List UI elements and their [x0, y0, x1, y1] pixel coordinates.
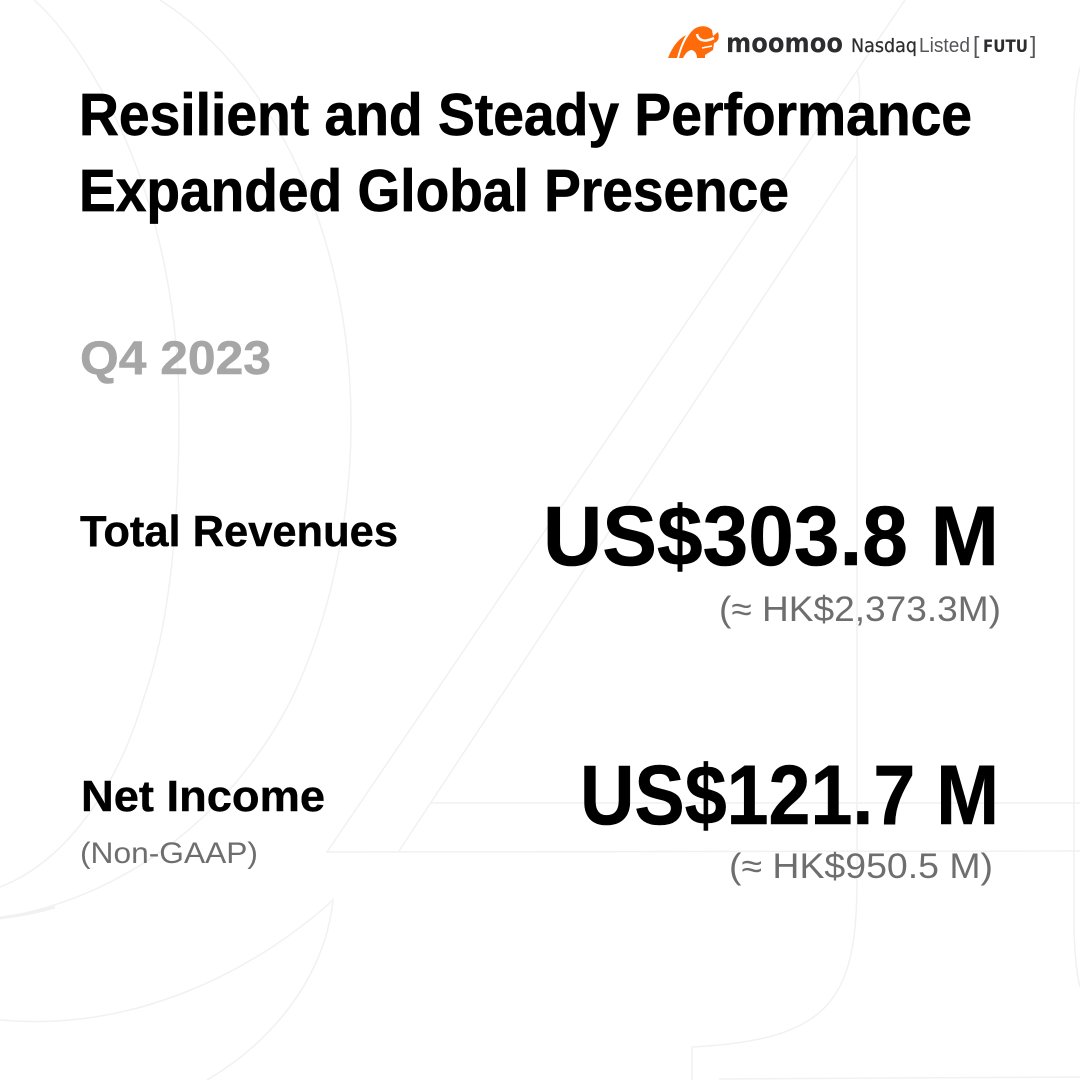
logo: moomoo Nasdaq Listed FUTU: [668, 26, 1036, 59]
title: Expanded Global Presence: [79, 158, 789, 224]
text: ticker FUTU: [: [973, 32, 980, 58]
metric label: Total Revenues: [80, 507, 398, 556]
title: [79, 82, 972, 224]
wordmark: moomoo: moomoo: [726, 28, 843, 59]
text: ticker FUTU: [973, 32, 1036, 58]
metric: net income: [80, 748, 999, 886]
metric value: US$303.8 M: [543, 489, 999, 583]
period label: Q4 2023: Q4 2023: [80, 331, 271, 384]
metric qualifier: (Non-GAAP): [80, 837, 258, 870]
HKD equivalent: (≈ HK$2,373.3M): [719, 590, 1001, 629]
text: Listed: Listed: [919, 35, 970, 57]
icon: orange bull: [668, 26, 719, 58]
metric: total revenues: [80, 489, 1001, 629]
metric label: Net Income: [81, 772, 325, 821]
text: ticker FUTU: ]: [1030, 32, 1036, 58]
text: Nasdaq: Nasdaq: [851, 35, 917, 57]
text: ticker FUTU: FUTU: [983, 37, 1028, 57]
HKD equivalent: (≈ HK$950.5 M): [729, 847, 993, 886]
title: Resilient and Steady Performance: [79, 82, 972, 148]
metric value: US$121.7 M: [580, 748, 999, 842]
